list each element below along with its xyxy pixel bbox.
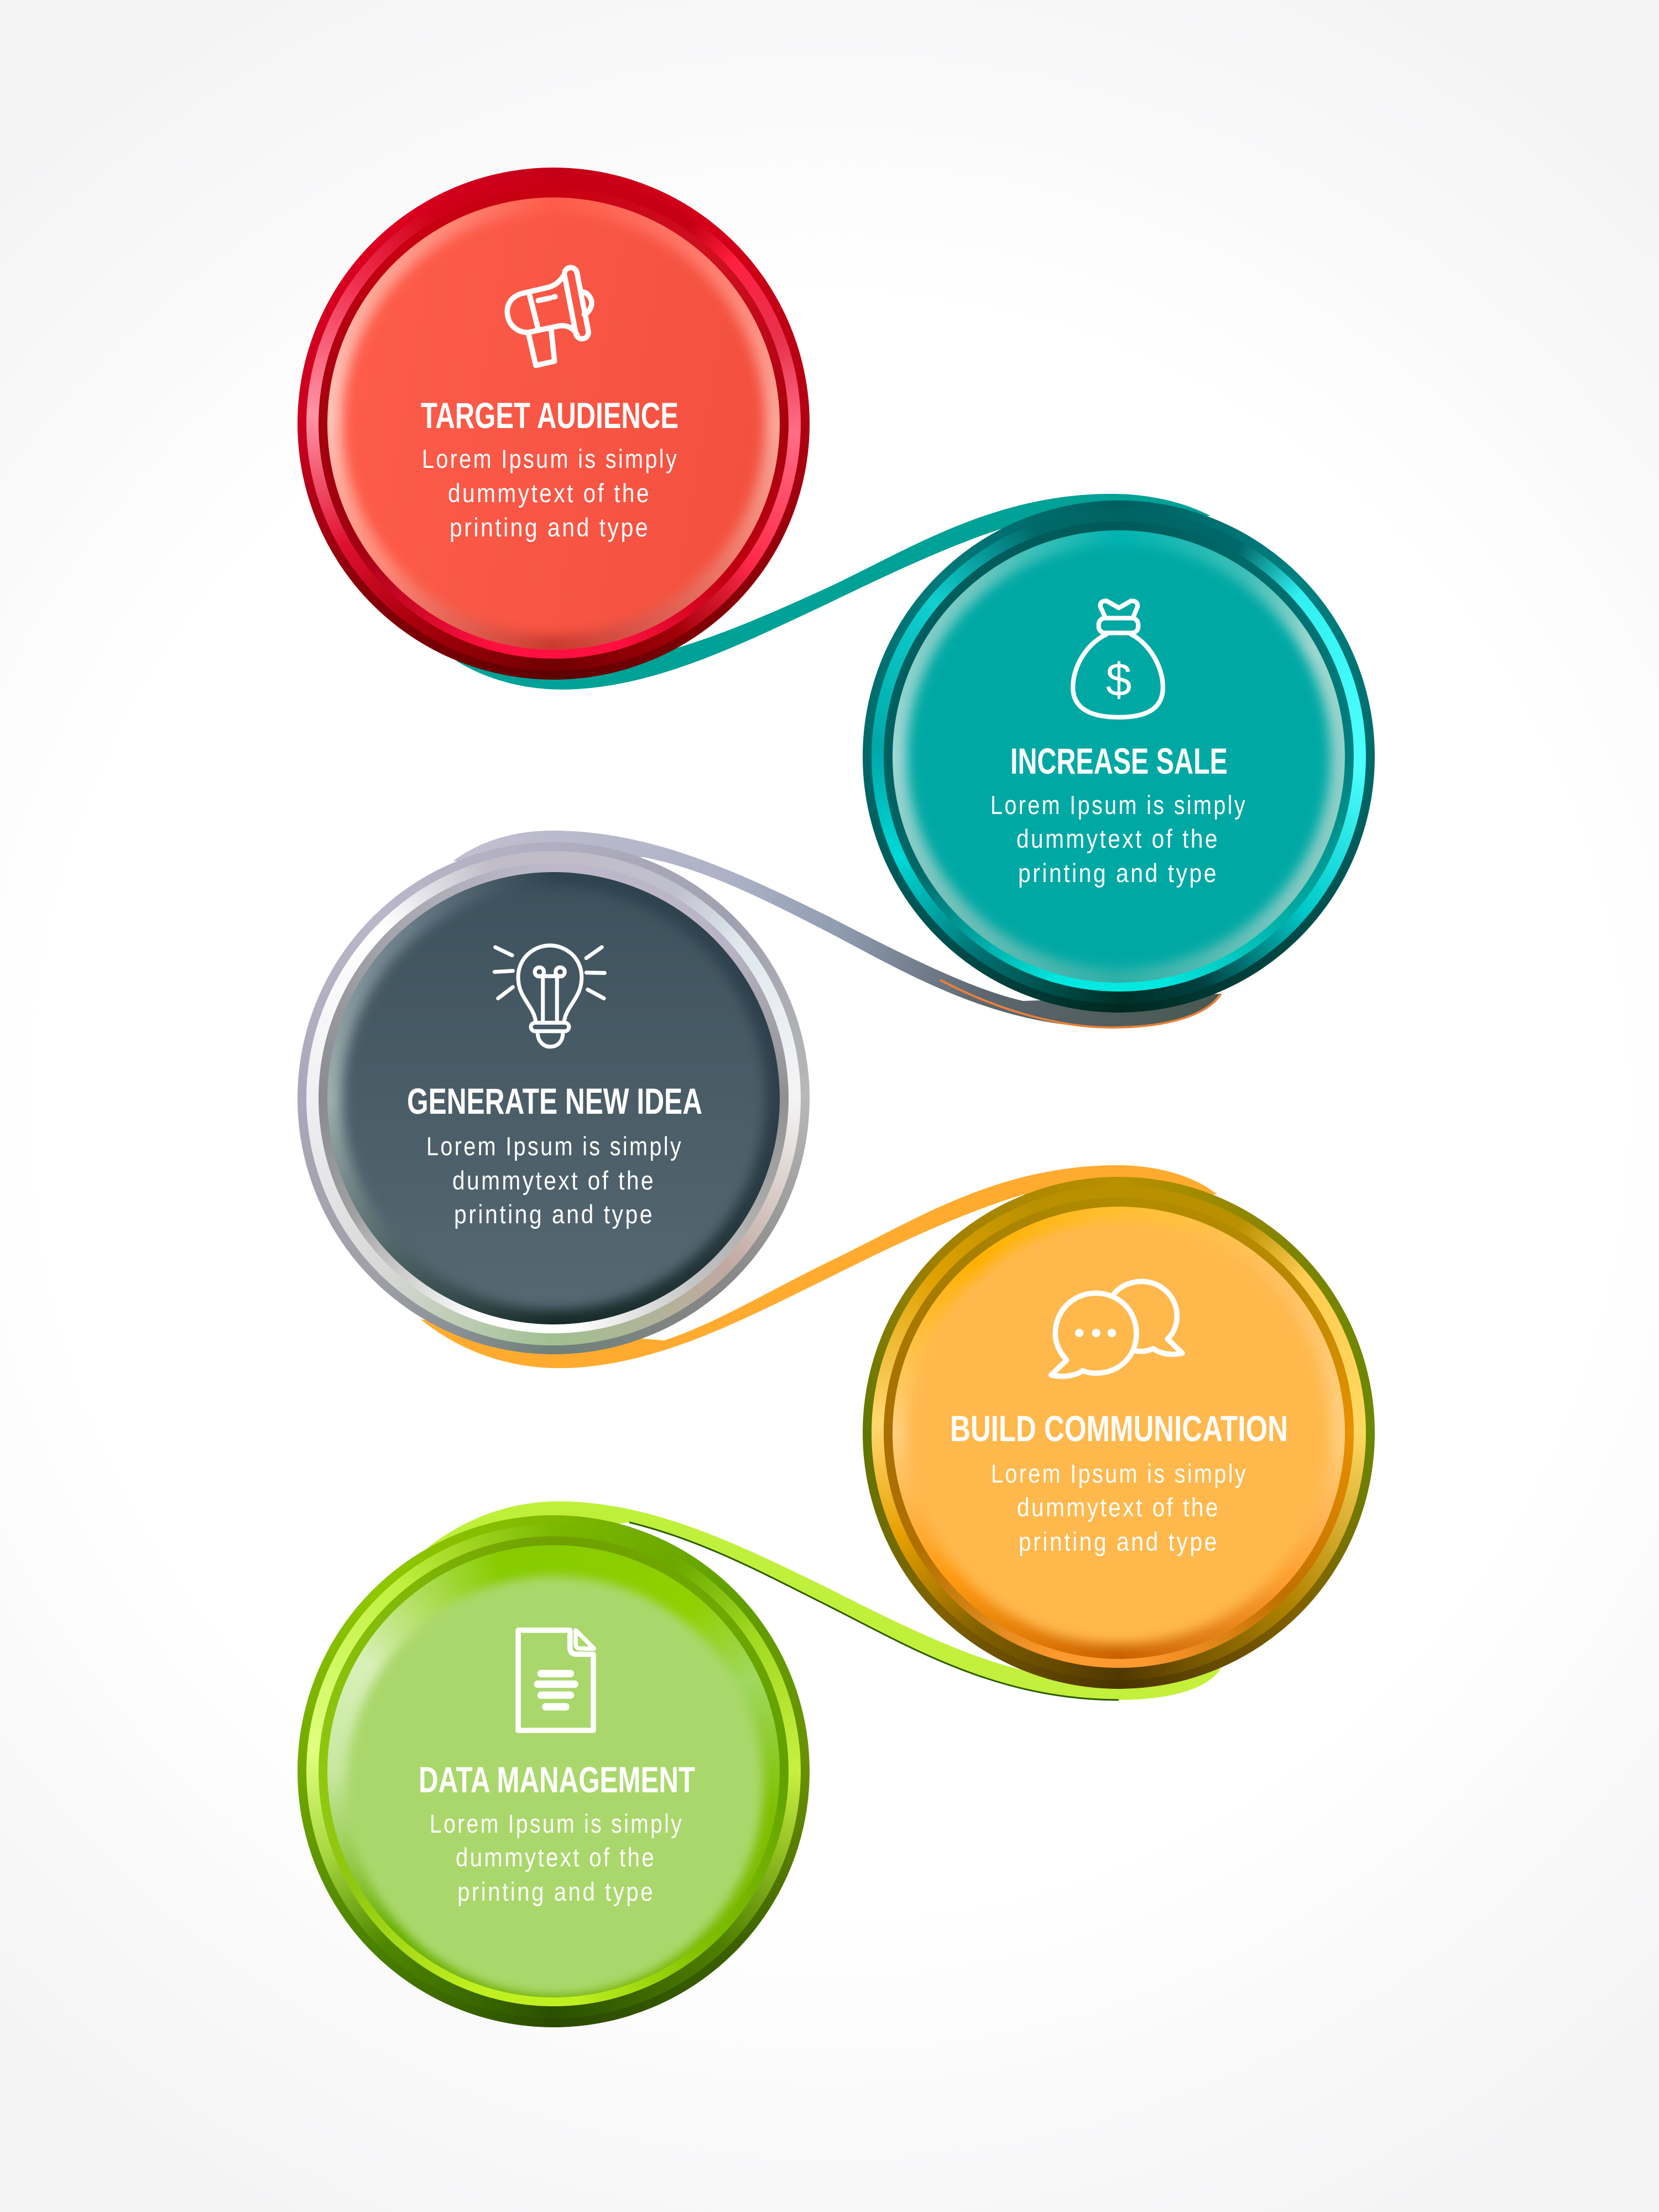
panel: generate new idea [298, 842, 810, 1354]
description: dummytext of the [452, 1166, 655, 1195]
title: INCREASE SALE [1010, 740, 1228, 781]
icon: document [518, 1630, 594, 1730]
description: printing and type [457, 1877, 655, 1906]
title: TARGET AUDIENCE [421, 395, 679, 436]
description [422, 444, 679, 542]
panel content [990, 598, 1247, 888]
icon: speech bubbles [1051, 1281, 1182, 1376]
title: GENERATE NEW IDEA [407, 1081, 702, 1121]
metallic rim and face [863, 1177, 1375, 1689]
title: BUILD COMMUNICATION [950, 1408, 1288, 1449]
description: dummytext of the [448, 478, 651, 508]
ribbon: lime [428, 1501, 1221, 1700]
icon: megaphone [507, 267, 592, 366]
ribbon: lime dark edge [629, 1522, 1119, 1700]
description: Lorem Ipsum is simply [991, 1459, 1248, 1488]
icon: money bag [1073, 601, 1163, 717]
panel: build communication [863, 1177, 1375, 1689]
metallic rim and face [298, 168, 810, 680]
description: Lorem Ipsum is simply [430, 1809, 684, 1838]
description [430, 1809, 684, 1906]
description: printing and type [454, 1199, 654, 1229]
panel content [419, 1627, 695, 1906]
description: dummytext of the [456, 1843, 656, 1872]
ribbon: teal [456, 494, 1211, 690]
ribbon: orange [421, 1165, 1217, 1368]
ribbon: silver [453, 831, 1221, 1027]
icon: dollar sign: $ [1106, 654, 1131, 706]
description: Lorem Ipsum is simply [426, 1131, 683, 1161]
description: dummytext of the [1016, 824, 1219, 853]
panel: target audience [298, 168, 810, 680]
description: Lorem Ipsum is simply [990, 790, 1247, 820]
metallic rim and face [298, 842, 810, 1354]
description [991, 1459, 1248, 1556]
panel: increase sale [863, 500, 1375, 1013]
icon: light bulb [494, 946, 604, 1047]
description: printing and type [450, 513, 650, 542]
description: dummytext of the [1017, 1493, 1220, 1522]
description: Lorem Ipsum is simply [422, 444, 679, 473]
metallic rim and face [863, 500, 1375, 1013]
icon: chat dots [1075, 1329, 1116, 1337]
panel content [950, 1279, 1288, 1556]
panel content [421, 265, 679, 542]
metallic rim and face [298, 1515, 810, 2027]
title: DATA MANAGEMENT [419, 1759, 695, 1800]
description: printing and type [1018, 858, 1218, 888]
ribbon: silver lower glint [940, 980, 1221, 1027]
panel content [407, 943, 702, 1229]
description [426, 1131, 683, 1229]
description: printing and type [1019, 1527, 1219, 1556]
description [990, 790, 1247, 888]
panel: data management [298, 1515, 810, 2027]
